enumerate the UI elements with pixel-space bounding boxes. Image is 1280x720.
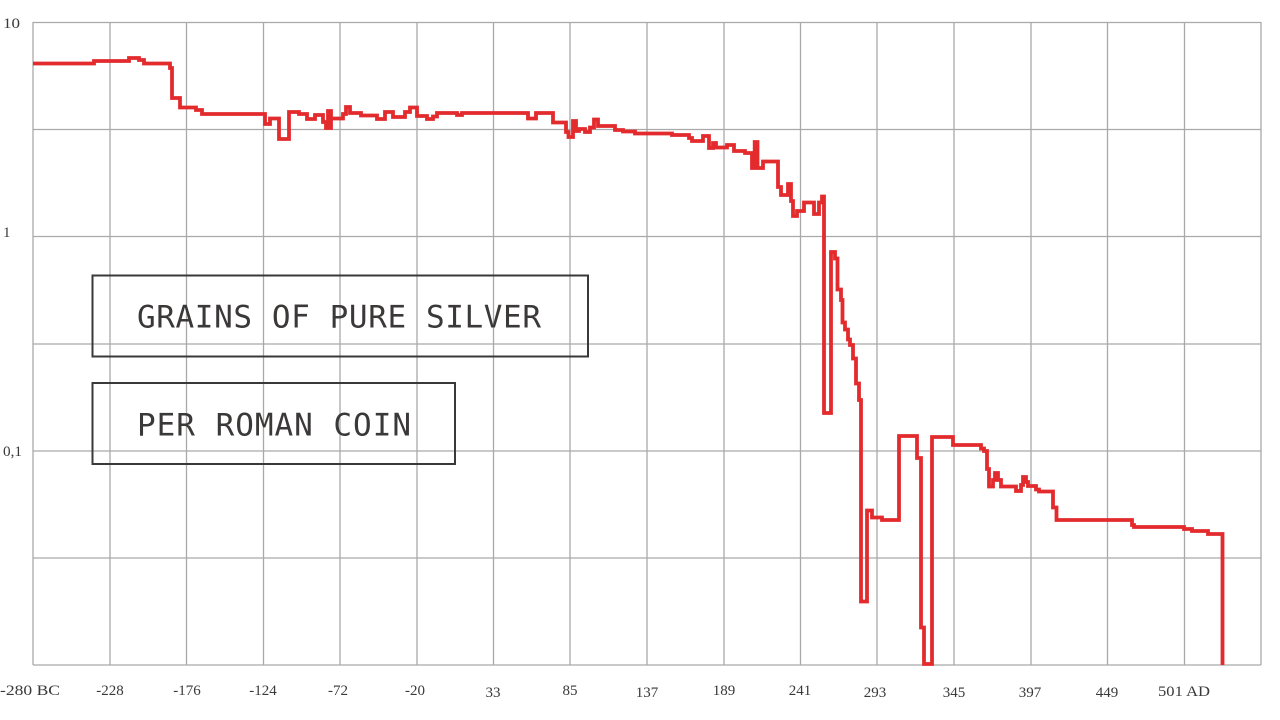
x axis labels: 85	[562, 683, 578, 699]
red line: grains of silver over time	[33, 58, 1222, 665]
title box: grains of pure silver: GRAINS OF PURE SILVER	[137, 300, 541, 336]
x axis labels: 241	[789, 683, 811, 699]
title box: per roman coin	[92, 383, 455, 464]
x axis labels: -228	[96, 683, 124, 699]
x axis labels: 345	[943, 685, 965, 701]
x axis labels: -124	[249, 683, 277, 699]
x axis labels: -176	[173, 683, 201, 699]
title box: per roman coin: PER ROMAN COIN	[137, 408, 411, 444]
x axis labels: 397	[1019, 685, 1042, 701]
x axis labels: 293	[864, 685, 886, 701]
y axis labels	[3, 16, 22, 460]
y axis labels: 0,1	[3, 444, 22, 460]
x axis labels: 137	[636, 685, 659, 701]
x axis labels: 501 AD	[1158, 684, 1210, 700]
x axis labels: 189	[713, 683, 735, 699]
y axis labels: 1	[3, 225, 10, 241]
x axis labels: -20	[405, 683, 425, 699]
x axis labels: 33	[486, 685, 500, 701]
x axis labels: -280 BC	[0, 683, 60, 699]
x axis labels: 449	[1096, 685, 1118, 701]
title box: grains of pure silver	[92, 276, 588, 356]
x axis labels: -72	[328, 683, 348, 699]
y axis labels: 10	[3, 16, 20, 32]
x axis labels	[0, 683, 1210, 701]
